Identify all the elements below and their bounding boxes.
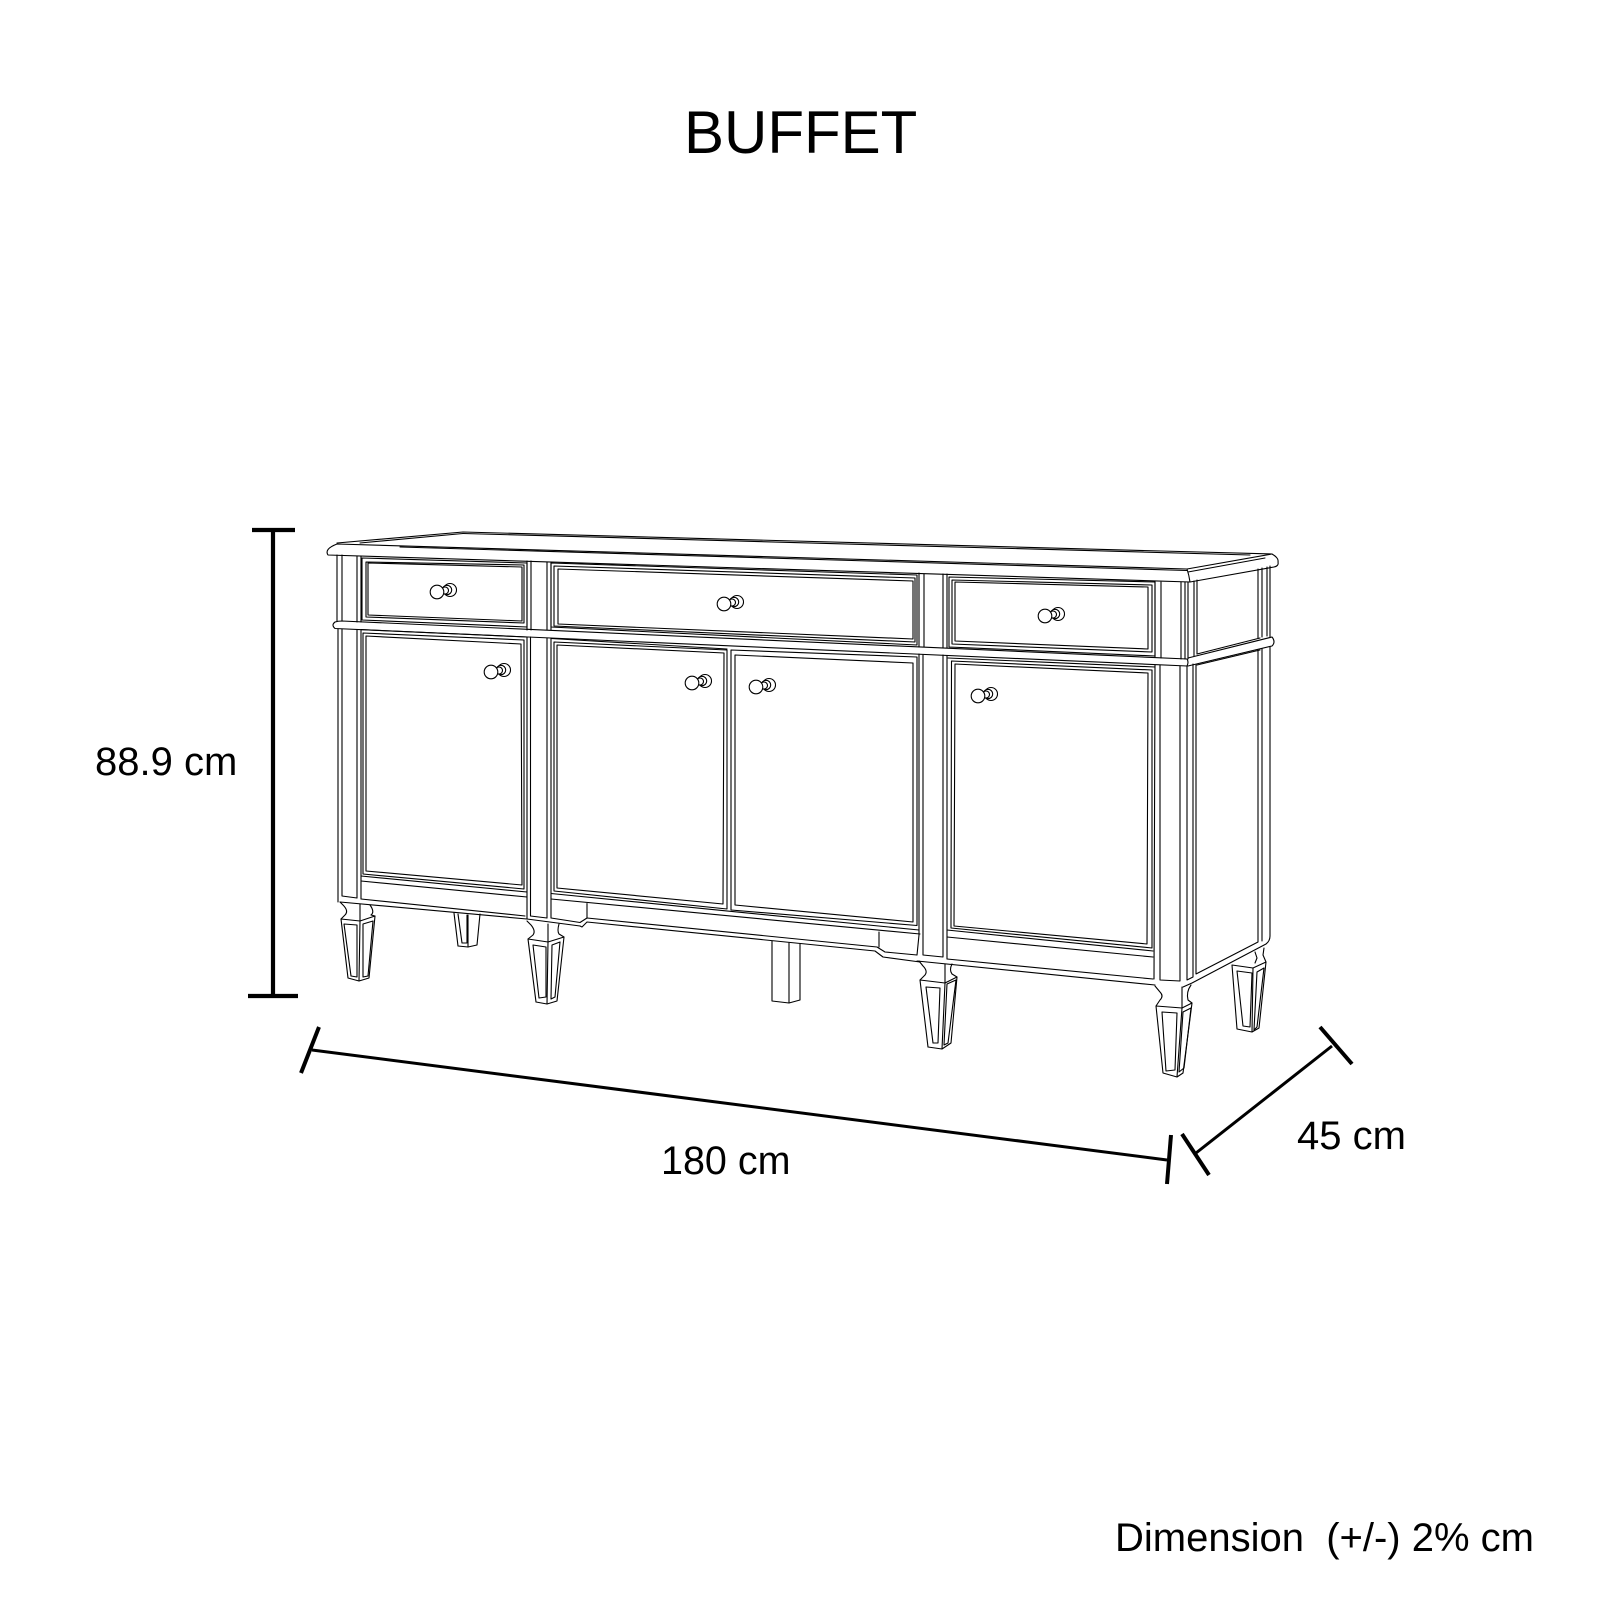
leg: back right (1232, 948, 1266, 1032)
label: width: 180 cm (661, 1139, 791, 1183)
mid moulding (333, 621, 1274, 666)
dimension: depth (1182, 1027, 1406, 1175)
lower pillars and side panel (338, 629, 1270, 987)
knob: left door (484, 664, 510, 679)
door: centre right (551, 650, 919, 930)
knob: centre-right door (749, 678, 776, 694)
drawer: centre (551, 563, 917, 645)
lower rails and apron (340, 881, 1155, 985)
drawer: right (949, 577, 1155, 656)
knob: centre-left door (685, 674, 712, 690)
title: BUFFET (684, 99, 917, 166)
label: depth: 45 cm (1297, 1114, 1406, 1158)
knob: left drawer (430, 584, 456, 599)
upper pillars (337, 555, 1270, 659)
leg: back centre (772, 941, 800, 1003)
leg: front far left (340, 902, 375, 981)
knob: right drawer (1038, 608, 1064, 623)
door: centre left (551, 638, 727, 909)
dimension: width (301, 1027, 1171, 1184)
door: far right (947, 658, 1155, 951)
leg: front centre left (527, 921, 564, 1004)
buffet line drawing (327, 532, 1278, 1077)
knob: right door (971, 688, 998, 703)
leg: back left (454, 913, 480, 947)
tolerance note: Dimension (+/-) 2% cm (1115, 1516, 1534, 1560)
leg: front centre right (919, 961, 957, 1049)
door: far left (361, 630, 527, 892)
leg: front far right (1155, 985, 1192, 1077)
label: height: 88.9 cm (95, 740, 237, 784)
knob: centre drawer (717, 596, 744, 611)
tabletop (327, 532, 1278, 582)
drawer: left (362, 558, 527, 627)
